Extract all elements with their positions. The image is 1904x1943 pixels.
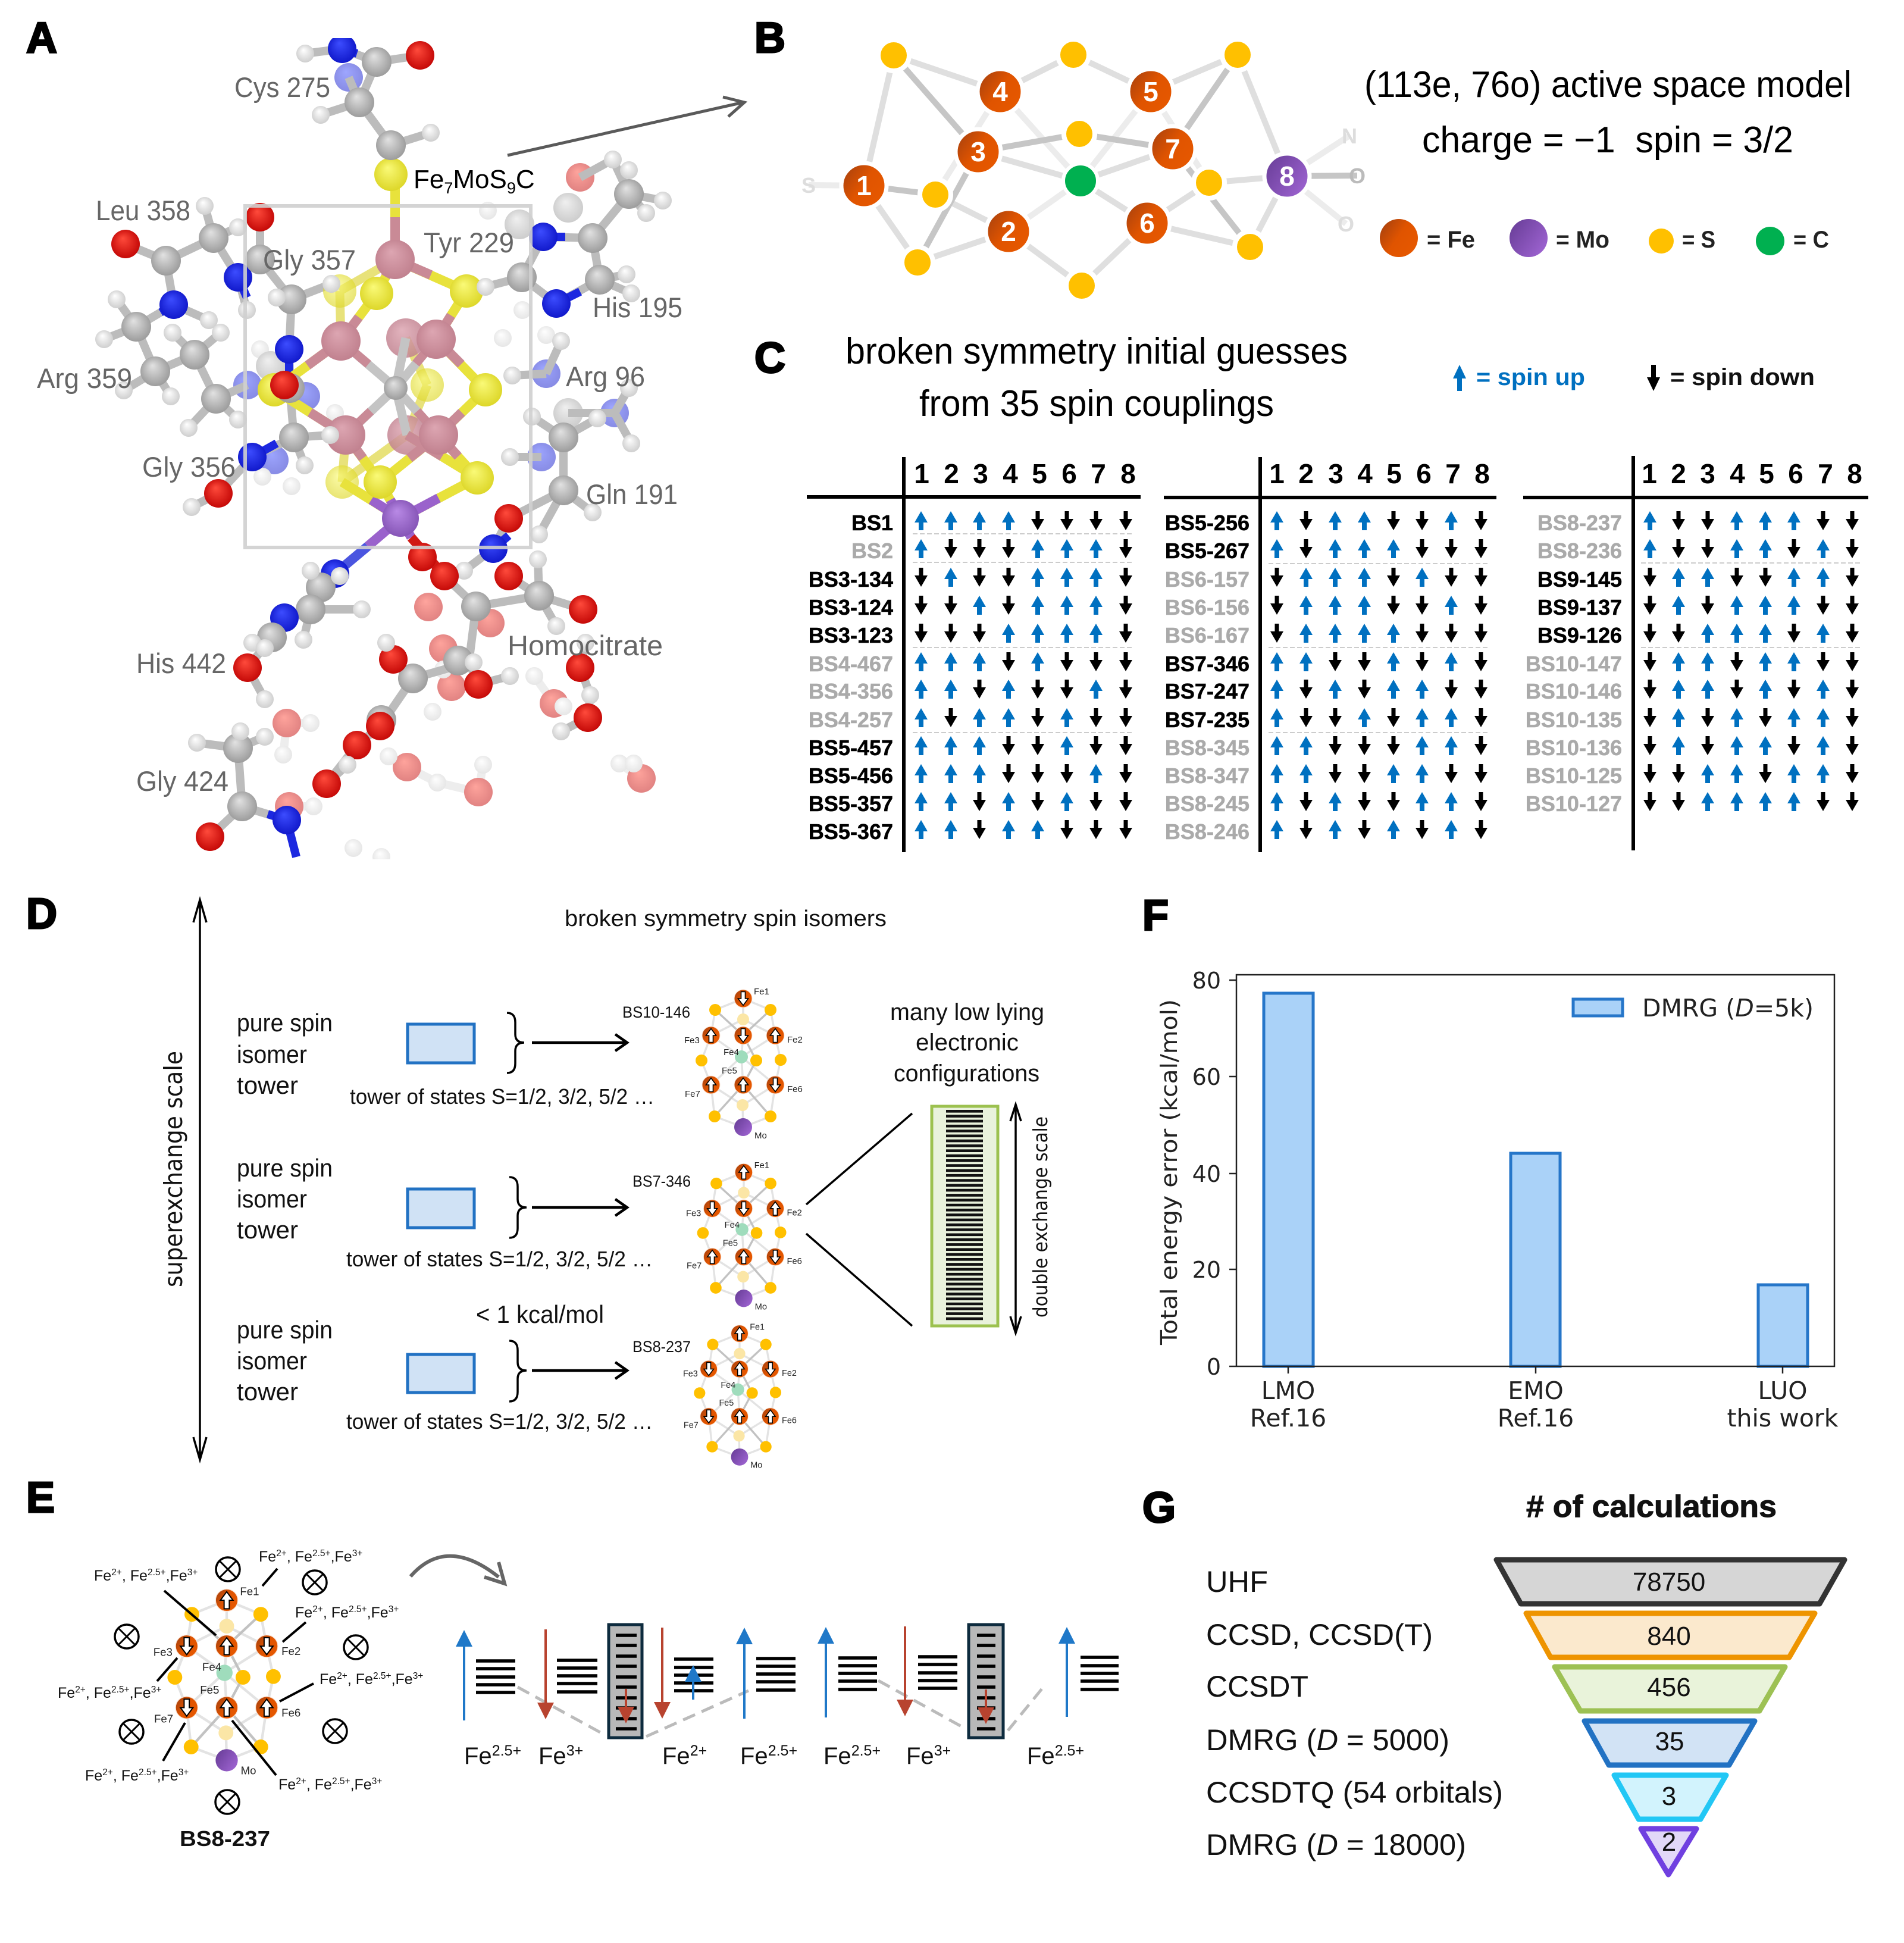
- panel F: bar chart: [1142, 892, 1839, 1432]
- oxidation state labels: Fe: [94, 1567, 111, 1584]
- tower boxes: [408, 1024, 474, 1393]
- cofactor formula label: 9: [507, 179, 516, 197]
- table 2: BS6-156: [1165, 595, 1250, 619]
- table 1: 2: [944, 458, 959, 489]
- back cofactor atoms: [323, 259, 444, 499]
- panel G: calculation funnel: [1142, 1484, 1844, 1875]
- large cluster BS8-237: Fe7: [154, 1712, 173, 1725]
- cluster BS10-146: Fe5: [722, 1066, 737, 1076]
- energy gap label: < 1 kcal/mol: [476, 1300, 604, 1328]
- panel D: energy scales: [26, 890, 1052, 1470]
- table 2: BS5-267: [1165, 539, 1250, 563]
- oxidation state labels: 2.5+: [139, 1767, 157, 1778]
- oxidation state labels: ,Fe: [157, 1767, 178, 1784]
- braces and arrows: [507, 1013, 627, 1401]
- oxidation state labels: ,Fe: [392, 1671, 413, 1688]
- pure spin labels: isomer: [237, 1347, 307, 1375]
- funnel title: # of calculations: [1526, 1490, 1777, 1524]
- table 3: BS9-145: [1537, 567, 1622, 592]
- oxidation state labels: ,Fe: [331, 1548, 352, 1565]
- table 1: 5: [1032, 458, 1047, 489]
- residue labels: Arg 359: [37, 362, 132, 394]
- funnel counts: 456: [1647, 1673, 1691, 1702]
- table 3: 8: [1847, 458, 1862, 489]
- cofactor formula label: Fe: [414, 165, 444, 194]
- residue labels: Gln 191: [586, 478, 678, 510]
- pure spin labels: pure spin: [237, 1154, 333, 1182]
- funnel counts: 35: [1655, 1727, 1684, 1756]
- level labels: Fe: [906, 1743, 934, 1769]
- active space heading: charge = −1 spin = 3/2: [1422, 120, 1793, 161]
- table 2: 8: [1474, 458, 1490, 489]
- table heading: broken symmetry initial guesses: [845, 331, 1348, 372]
- table 2: 3: [1328, 458, 1344, 489]
- cluster BS10-146: Fe4: [724, 1047, 739, 1057]
- oxidation state labels: 2.5+: [111, 1685, 130, 1695]
- level labels: Fe: [823, 1743, 851, 1769]
- level labels: 2.5+: [1055, 1742, 1084, 1759]
- large cluster BS8-237: Fe5: [200, 1684, 219, 1696]
- funnel counts: 2: [1662, 1828, 1676, 1857]
- double exchange label: double exchange scale: [1029, 1116, 1052, 1318]
- cluster BS7-346: Fe3: [686, 1209, 701, 1218]
- pure spin labels: [237, 1009, 333, 1406]
- level labels: Fe: [538, 1743, 566, 1769]
- oxidation state labels: , Fe: [86, 1685, 111, 1701]
- table 2: BS8-345: [1165, 736, 1250, 760]
- oxidation state labels: 2.5+: [373, 1671, 392, 1681]
- table 1: 3: [973, 458, 988, 489]
- panel letter G: G: [1142, 1484, 1176, 1532]
- large cluster BS8-237: Fe4: [202, 1660, 221, 1673]
- level labels: 2.5+: [768, 1742, 797, 1759]
- isomer caption: BS8-237: [180, 1826, 270, 1851]
- table 2: BS6-167: [1165, 623, 1250, 647]
- panel letter B: B: [754, 14, 785, 62]
- cluster BS10-146: Fe1: [754, 987, 769, 997]
- table 2: BS5-256: [1165, 511, 1250, 535]
- oxidation state labels: ,Fe: [166, 1567, 187, 1584]
- oxidation state labels: 3+: [413, 1671, 423, 1681]
- cluster diagram: [801, 39, 1366, 301]
- cluster BS8-237: Fe4: [721, 1381, 735, 1390]
- legend: DMRG (D=5k): [1642, 994, 1814, 1022]
- cluster BS10-146: Mo: [754, 1131, 767, 1141]
- table 2: 6: [1416, 458, 1432, 489]
- table 1: BS3-134: [809, 567, 893, 592]
- table 2: 2: [1298, 458, 1314, 489]
- panel letter E: E: [26, 1474, 55, 1522]
- method labels: [1206, 1565, 1503, 1861]
- oxidation state labels: , Fe: [347, 1671, 373, 1688]
- low lying configurations text: many low lying: [890, 999, 1044, 1025]
- method labels: DMRG (D = 5000): [1206, 1723, 1449, 1757]
- cluster diagram: 5: [1143, 76, 1158, 107]
- level labels: [464, 1742, 1084, 1769]
- panel B: active space model: [754, 14, 1852, 301]
- cluster BS10-146: [684, 987, 803, 1141]
- method labels: CCSDT: [1206, 1670, 1308, 1703]
- table 1: BS2: [851, 539, 893, 563]
- table 1: BS5-456: [809, 764, 893, 788]
- residue labels: Gly 357: [263, 244, 356, 276]
- oxidation state labels: 2+: [337, 1671, 347, 1681]
- oxidation state labels: , Fe: [122, 1567, 148, 1584]
- y tick labels: [1192, 968, 1221, 1380]
- tower of states captions: tower of states S=1/2, 3/2, 5/2 …: [350, 1084, 654, 1109]
- level labels: Fe: [464, 1743, 492, 1769]
- isomer names: BS8-237: [632, 1338, 691, 1356]
- table 1: BS5-367: [809, 819, 893, 844]
- y tick labels: 20: [1192, 1257, 1221, 1283]
- oxidation state labels: , Fe: [306, 1776, 332, 1793]
- superexchange arrow: [193, 900, 206, 1460]
- level labels: Fe: [662, 1743, 690, 1769]
- table 1: 8: [1120, 458, 1136, 489]
- oxidation state labels: Fe: [259, 1548, 276, 1565]
- double exchange arrow: [1010, 1105, 1021, 1333]
- cluster BS8-237: Fe2: [782, 1369, 797, 1378]
- cluster diagram: 4: [992, 76, 1008, 107]
- table 2: BS7-346: [1165, 652, 1250, 676]
- table 1: BS5-357: [809, 791, 893, 816]
- spin legend: = spin down: [1670, 364, 1815, 390]
- panel letter F: F: [1142, 892, 1169, 940]
- funnel counts: 78750: [1633, 1567, 1705, 1597]
- residue labels: Homocitrate: [508, 630, 663, 661]
- cluster diagram: S: [801, 173, 816, 198]
- oxidation state labels: 2.5+: [312, 1548, 331, 1559]
- pure spin labels: tower: [237, 1216, 298, 1244]
- level labels: 2.5+: [492, 1742, 521, 1759]
- axes: [1229, 975, 1834, 1373]
- table 3: BS9-137: [1537, 595, 1622, 619]
- table 1: BS4-356: [809, 679, 893, 703]
- pure spin labels: tower: [237, 1378, 298, 1406]
- residue labels: Arg 96: [566, 361, 645, 392]
- table 1: [807, 457, 1141, 852]
- table 3: BS10-125: [1526, 764, 1622, 788]
- table 2: BS8-246: [1165, 819, 1250, 844]
- table 1: BS4-467: [809, 652, 893, 676]
- cluster BS7-346: Fe7: [687, 1262, 702, 1271]
- pure spin labels: pure spin: [237, 1316, 333, 1344]
- pure spin labels: pure spin: [237, 1009, 333, 1037]
- oxidation state labels: , Fe: [113, 1767, 139, 1784]
- cluster BS10-146: Fe7: [685, 1089, 700, 1099]
- residue labels: His 442: [136, 647, 226, 679]
- table 2: 7: [1445, 458, 1461, 489]
- curved arrow: [411, 1556, 505, 1584]
- oxidation state labels: Fe: [320, 1671, 337, 1688]
- cluster BS8-237: Fe7: [684, 1421, 699, 1430]
- oxidation state labels: , Fe: [323, 1604, 349, 1621]
- tower of states captions: tower of states S=1/2, 3/2, 5/2 …: [346, 1247, 653, 1271]
- cluster BS8-237: Mo: [750, 1461, 762, 1470]
- residue labels: [37, 71, 682, 797]
- large cluster BS8-237: [154, 1585, 300, 1777]
- level labels: 3+: [566, 1742, 583, 1759]
- table 3: 4: [1730, 458, 1745, 489]
- table heading: from 35 spin couplings: [919, 383, 1274, 424]
- oxidation state labels: , Fe: [287, 1548, 312, 1565]
- cluster BS8-237: Fe3: [683, 1369, 698, 1379]
- cluster BS8-237: [683, 1322, 797, 1470]
- large cluster BS8-237: Fe2: [281, 1645, 300, 1657]
- table 3: 3: [1700, 458, 1715, 489]
- cluster BS10-146: Fe6: [787, 1084, 803, 1094]
- table 2: 1: [1269, 458, 1285, 489]
- isomer names: [622, 1003, 691, 1356]
- oxidation state labels: Fe: [278, 1776, 296, 1793]
- atom legend: [1380, 219, 1829, 257]
- table 1: BS3-123: [809, 623, 893, 647]
- oxidation state labels: ,Fe: [130, 1685, 151, 1701]
- y axis title: Total energy error (kcal/mol): [1156, 999, 1182, 1346]
- cluster BS7-346: Fe1: [754, 1161, 769, 1171]
- cluster BS8-237: Fe1: [750, 1322, 765, 1332]
- low lying configurations text: [890, 999, 1044, 1087]
- large cluster BS8-237: Fe3: [154, 1645, 173, 1658]
- tower of states captions: tower of states S=1/2, 3/2, 5/2 …: [346, 1409, 653, 1434]
- cofactor formula label: 7: [444, 179, 453, 197]
- cluster BS10-146: Fe2: [787, 1035, 803, 1045]
- panel E: charge configurations: [26, 1474, 1119, 1851]
- cluster diagram: 8: [1279, 161, 1295, 192]
- cluster diagram: 2: [1001, 216, 1016, 247]
- table 3: BS10-135: [1526, 708, 1622, 732]
- oxidation state labels: Fe: [85, 1767, 102, 1784]
- residue labels: Gly 356: [142, 451, 236, 483]
- y tick labels: 80: [1192, 968, 1221, 994]
- oxidation state labels: 3+: [389, 1604, 399, 1615]
- cluster diagram: 3: [970, 136, 986, 167]
- x tick labels: LUO: [1758, 1376, 1808, 1405]
- oxidation state labels: ,Fe: [367, 1604, 389, 1621]
- table 2: [1164, 457, 1496, 852]
- table 3: BS10-146: [1526, 679, 1622, 703]
- funnel counts: 840: [1647, 1622, 1691, 1651]
- method labels: DMRG (D = 18000): [1206, 1828, 1466, 1861]
- residue labels: Gly 424: [136, 765, 228, 797]
- crossed circles: [115, 1557, 368, 1814]
- residue labels: Cys 275: [234, 71, 330, 103]
- cluster BS8-237: Fe5: [719, 1398, 734, 1408]
- atom legend: = Fe: [1427, 227, 1475, 253]
- table 2: BS6-157: [1165, 567, 1250, 592]
- low lying configurations text: configurations: [894, 1060, 1039, 1087]
- pure spin labels: isomer: [237, 1185, 307, 1213]
- funnel shapes: [1496, 1560, 1844, 1875]
- table 3: 2: [1671, 458, 1686, 489]
- table 2: BS7-247: [1165, 679, 1250, 703]
- panel C: broken symmetry table: [754, 331, 1868, 852]
- table 1: BS4-257: [809, 708, 893, 732]
- table 1: 4: [1003, 458, 1018, 489]
- level labels: 3+: [934, 1742, 951, 1759]
- table 2: 5: [1386, 458, 1402, 489]
- oxidation state labels: ,Fe: [350, 1776, 372, 1793]
- atom legend: = S: [1682, 227, 1715, 253]
- pure spin labels: tower: [237, 1071, 298, 1099]
- oxidation state labels: 2+: [312, 1604, 323, 1615]
- oxidation state labels: 3+: [352, 1548, 362, 1559]
- low lying configurations text: electronic: [916, 1030, 1019, 1056]
- large cluster BS8-237: Fe6: [281, 1706, 300, 1719]
- electronic levels box: [932, 1106, 998, 1326]
- oxidation state labels: 3+: [178, 1767, 189, 1778]
- pure spin labels: isomer: [237, 1040, 307, 1068]
- y tick labels: 0: [1207, 1354, 1221, 1380]
- cluster BS10-146: Fe3: [684, 1035, 700, 1046]
- cluster diagram: 6: [1139, 208, 1155, 239]
- funnel counts: 3: [1662, 1782, 1676, 1811]
- oxidation state labels: 2.5+: [332, 1776, 350, 1786]
- table 3: 6: [1788, 458, 1803, 489]
- molecule render: [95, 35, 672, 866]
- residue labels: Tyr 229: [424, 227, 514, 258]
- table 3: 7: [1818, 458, 1833, 489]
- oxidation state labels: 3+: [372, 1776, 382, 1786]
- large cluster BS8-237: Fe1: [240, 1585, 259, 1597]
- oxidation state labels: Fe: [58, 1685, 75, 1701]
- atom legend: = C: [1793, 227, 1829, 253]
- panel A: molecular structure: [26, 14, 744, 866]
- table 3: 1: [1642, 458, 1657, 489]
- oxidation state labels: 2+: [102, 1767, 113, 1778]
- cluster diagram: N: [1342, 124, 1357, 148]
- oxidation state labels: 2.5+: [148, 1567, 166, 1578]
- table 2: BS8-347: [1165, 764, 1250, 788]
- cofactor formula label: MoS: [453, 165, 507, 194]
- table 2: BS7-235: [1165, 708, 1250, 732]
- table heading: [845, 331, 1348, 424]
- cluster BS7-346: Fe5: [723, 1238, 738, 1248]
- table 1: 6: [1061, 458, 1077, 489]
- level labels: 2.5+: [851, 1742, 881, 1759]
- panel letter D: D: [26, 890, 57, 938]
- table 3: BS10-127: [1526, 791, 1622, 816]
- oxidation state labels: 2+: [111, 1567, 122, 1578]
- panel letter A: A: [26, 14, 57, 62]
- oxidation state labels: Fe: [295, 1604, 312, 1621]
- cluster diagram: 7: [1165, 133, 1180, 164]
- arrow to panel B: [508, 97, 744, 155]
- y tick labels: 40: [1192, 1161, 1221, 1187]
- tower of states captions: [346, 1084, 654, 1434]
- atom legend: = Mo: [1556, 227, 1609, 253]
- table 3: BS8-237: [1537, 511, 1622, 535]
- table 2: 4: [1357, 458, 1373, 489]
- x tick labels: EMO: [1508, 1376, 1564, 1405]
- residue labels: His 195: [593, 292, 682, 323]
- table 3: 5: [1759, 458, 1774, 489]
- active space heading: [1364, 64, 1852, 161]
- active space heading: (113e, 76o) active space model: [1364, 64, 1852, 105]
- x tick labels: LMO: [1261, 1376, 1315, 1405]
- table 1: 7: [1091, 458, 1106, 489]
- cluster BS7-346: Fe6: [787, 1257, 802, 1266]
- oxidation state labels: 3+: [151, 1685, 161, 1695]
- table 3: [1523, 456, 1868, 850]
- level labels: Fe: [1027, 1743, 1055, 1769]
- column heading: broken symmetry spin isomers: [565, 906, 887, 931]
- zoom lines to level box: [806, 1113, 912, 1326]
- method labels: CCSDTQ (54 orbitals): [1206, 1776, 1503, 1809]
- cluster BS8-237: Fe6: [782, 1416, 797, 1426]
- cluster diagram: 1: [856, 170, 872, 201]
- cluster BS7-346: Fe2: [787, 1209, 802, 1218]
- funnel counts: [1633, 1567, 1705, 1857]
- cluster BS7-346: Fe4: [725, 1221, 740, 1230]
- cluster BS7-346: Mo: [755, 1302, 767, 1312]
- level labels: Fe: [740, 1743, 768, 1769]
- isomer names: BS7-346: [632, 1172, 691, 1190]
- oxidation state labels: 2.5+: [349, 1604, 367, 1615]
- table 2: BS8-245: [1165, 791, 1250, 816]
- bars: [1264, 993, 1808, 1366]
- residue labels: Leu 358: [96, 195, 190, 226]
- y tick labels: 60: [1192, 1064, 1221, 1090]
- table 1: 1: [914, 458, 929, 489]
- panel letter C: C: [754, 334, 785, 382]
- cluster BS7-346: [686, 1161, 802, 1312]
- oxidation state labels: 2+: [75, 1685, 86, 1695]
- table 3: BS8-236: [1537, 539, 1622, 563]
- level diagram: [456, 1625, 1119, 1738]
- oxidation state labels: 2+: [296, 1776, 306, 1786]
- oxidation state labels: 3+: [187, 1567, 198, 1578]
- x tick labels: Ref.16: [1498, 1404, 1574, 1432]
- oxidation state labels: 2+: [276, 1548, 287, 1559]
- table 1: BS1: [851, 511, 893, 535]
- x tick labels: this work: [1727, 1404, 1839, 1432]
- superexchange label: superexchange scale: [159, 1051, 188, 1287]
- table 3: BS10-147: [1526, 652, 1622, 676]
- cluster diagram: O: [1338, 212, 1354, 236]
- level labels: 2+: [690, 1742, 707, 1759]
- x tick labels: Ref.16: [1250, 1404, 1326, 1432]
- table 3: BS9-126: [1537, 623, 1622, 647]
- cluster diagram: O: [1349, 164, 1366, 188]
- isomer names: BS10-146: [622, 1003, 690, 1021]
- large cluster BS8-237: Mo: [241, 1764, 256, 1777]
- spin legend: [1453, 364, 1815, 391]
- method labels: UHF: [1206, 1565, 1268, 1598]
- cofactor formula label: C: [516, 165, 535, 194]
- x tick labels: [1250, 1376, 1839, 1432]
- method labels: CCSD, CCSD(T): [1206, 1618, 1433, 1651]
- table 1: BS3-124: [809, 595, 893, 619]
- table 3: BS10-136: [1526, 736, 1622, 760]
- leader lines: [157, 1569, 314, 1775]
- spin legend: = spin up: [1476, 364, 1585, 390]
- highlight box around cofactor: [245, 206, 531, 547]
- table 1: BS5-457: [809, 736, 893, 760]
- oxidation state labels: [58, 1548, 423, 1793]
